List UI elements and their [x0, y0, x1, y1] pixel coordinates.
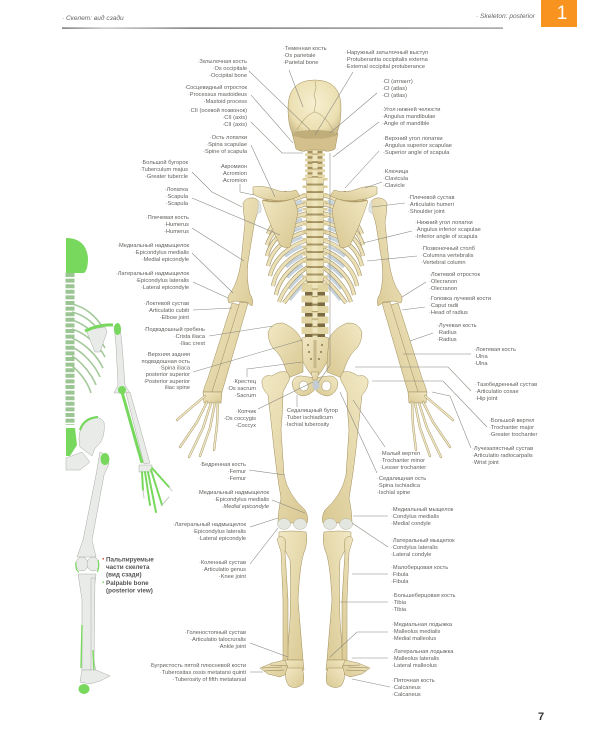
label: greater trochanter: ·Trochanter major [489, 425, 534, 431]
label: lateral malleolus: ·Латеральная лодыжка [392, 649, 453, 655]
label: shoulder joint: ·Плечевой сустав [408, 195, 454, 201]
legend: palpable bone: Пальпируемые [106, 556, 154, 564]
label: inferior angle of scapula: ·Inferior angle of scapula [415, 234, 478, 240]
label: ankle joint: ·Голеностопный сустав [185, 630, 246, 636]
label: parietal bone: ·Os parietale [283, 53, 316, 59]
label: coccyx: ·Os coccygis [223, 416, 256, 422]
label: head of radius: ·Головка лучевой кости [429, 296, 491, 302]
label: mastoid process: ·Сосцевидный отросток [184, 85, 247, 91]
label: atlas: ·CI (atlas) [382, 86, 407, 92]
mini ribs [72, 304, 105, 393]
ribs [267, 195, 308, 308]
label: fibula: ·Fibula [391, 579, 409, 585]
femur [262, 372, 308, 523]
femoral condyles [278, 518, 306, 530]
label: knee joint: ·Коленный сустав [199, 560, 246, 566]
label: ischial spine: ·Spina ischiadica [377, 483, 420, 489]
mini spine [66, 273, 74, 425]
label: lateral epicondyle of humerus: ·Латеральный надмыщелок [116, 271, 189, 277]
label: greater tubercle: ·Большой бугорок [141, 160, 188, 166]
label: superior angle of scapula: ·Angulus superior scapulae [383, 143, 452, 149]
label: elbow joint: ·Articulatio cubiti [147, 308, 189, 314]
mini sacrum [66, 428, 77, 456]
label: tibia: ·Tibia [392, 600, 406, 606]
mini olecranon [118, 386, 126, 394]
chapter tab: 1 [557, 3, 567, 24]
clavicle and acromion [253, 186, 300, 201]
label: calcaneus: ·Calcaneus [392, 685, 421, 691]
label: superior angle of scapula: ·Верхний угол лопатки [383, 136, 443, 142]
label: greater tubercle: ·Tuberculum majus [140, 167, 188, 173]
label: inferior angle of scapula: ·Angulus inferior scapulae [415, 227, 481, 233]
mini hand [139, 465, 172, 512]
label: lateral malleolus: ·Malleolus lateralis [392, 656, 439, 662]
label: hip joint: ·Hip joint [475, 396, 498, 402]
label: angle of mandible: ·Angulus mandibulae [382, 114, 435, 120]
label: lateral epicondyle of humerus: ·Lateral epicondyle [141, 285, 189, 291]
mini clavicle [85, 325, 113, 331]
label: lateral epicondyle of femur: ·Латеральный надмыщелок [173, 522, 246, 528]
label: medial malleolus: ·Malleolus medialis [392, 629, 440, 635]
legend: palpable bone [102, 556, 154, 594]
header rule [62, 28, 503, 29]
mini shin highlights [81, 625, 94, 672]
sutures [297, 81, 333, 130]
label: humerus: ·Humerus [164, 222, 189, 228]
label: medial epicondyle of femur: ·Медиальный надмыщелок [197, 490, 269, 496]
label: posterior superior iliac spine: подвздошная ость [142, 359, 190, 365]
label: acromion: ·Acromion [221, 178, 247, 184]
calcaneus [285, 668, 304, 688]
label: occipital bone: ·Os occipitale [213, 66, 247, 72]
fingers [177, 396, 218, 457]
label: medial epicondyle of humerus: ·Медиальный надмыщелок [117, 243, 189, 249]
ischial ring [292, 376, 316, 396]
label: posterior superior iliac spine: ·Spina iliaca [159, 366, 190, 372]
label: coccyx: ·Копчик [236, 409, 256, 415]
fibula [277, 536, 288, 668]
label: spine of scapula: ·Ость лопатки [210, 135, 247, 141]
label: axis: ·CII (axis) [222, 115, 247, 121]
label: spine of scapula: ·Spina scapulae [206, 142, 247, 148]
label: greater trochanter: ·Greater trochanter [489, 432, 537, 438]
label: ulna: ·Ulna [474, 361, 488, 367]
label: scapula: ·Scapula [166, 201, 189, 207]
label: wrist joint: ·Wrist joint [472, 460, 499, 466]
label: fibula: ·Малоберцовая кость [391, 565, 448, 571]
label: clavicle: ·Ключица [383, 169, 408, 175]
tibia [279, 531, 307, 660]
label: axis: ·CII (axis) [222, 122, 247, 128]
legend: palpable bone: (posterior view) [106, 588, 153, 594]
label: radius: ·Radius [437, 337, 457, 343]
label: parietal bone: ·Теменная кость [283, 46, 327, 52]
mini foot [80, 670, 110, 684]
label: lateral malleolus: ·Lateral malleolus [392, 663, 437, 669]
mini ilium [79, 417, 104, 456]
label: ulna: ·Локтевая кость [474, 347, 516, 353]
sacrum [302, 336, 329, 378]
label: medial epicondyle of femur: ·Epicondylus medialis [214, 497, 269, 503]
label: scapula: ·Scapula [166, 194, 188, 200]
ilium [268, 323, 303, 378]
label: hip joint: ·Тазобедренный сустав [475, 382, 537, 388]
legend: palpable bone: (вид сзади) [106, 572, 142, 578]
label: vertebral column: ·Vertebral column [421, 260, 466, 266]
pubic symphysis [312, 380, 320, 390]
mini skull [66, 238, 88, 273]
legend: palpable bone: части скелета [106, 564, 150, 571]
label: clavicle: ·Clavicula [383, 176, 408, 182]
label: greater trochanter: ·Большой вертел [489, 418, 534, 424]
label: sacrum: ·Крестец [233, 379, 256, 385]
leader lines [192, 70, 487, 687]
label: humerus: ·Humerus [164, 229, 189, 235]
chapter tab [541, 0, 577, 27]
label: tuberosity of fifth metatarsal: ·Tuberositas ossis metatarsi quinti [160, 670, 246, 676]
label: shoulder joint: ·Articulatio humeri [408, 202, 454, 208]
label: medial condyle: ·Медиальный мыщелок [391, 507, 453, 513]
label: iliac crest: ·Iliac crest [179, 341, 205, 347]
label: olecranon: ·Olecranon [429, 279, 457, 285]
mini trochanter [100, 453, 110, 465]
page number: 7 [538, 711, 544, 723]
label: sacrum: ·Sacrum [234, 393, 256, 399]
label: sacrum: ·Os sacrum [227, 386, 256, 392]
label: shoulder joint: ·Shoulder joint [408, 209, 445, 215]
label: vertebral column: ·Columna vertebralis [421, 253, 473, 259]
label: fibula: ·Fibula [391, 572, 408, 578]
label: occipital bone: ·Occipital bone [209, 73, 247, 79]
label: ankle joint: ·Articulatio talocruralis [190, 637, 246, 643]
header [62, 0, 577, 29]
label: occipital bone: ·Затылочная кость [197, 59, 247, 65]
humerus [228, 198, 260, 306]
label: tuberosity of fifth metatarsal: ·Tuberosity of fifth metatarsal [173, 677, 246, 683]
label: lateral condyle: ·Lateral condyle [391, 552, 431, 558]
label: femur: ·Femur [228, 469, 246, 475]
label: coccyx: ·Coccyx [235, 423, 256, 429]
label: tuberosity of fifth metatarsal: ·Бугристость пятой плюсневой кости [149, 663, 246, 669]
label: ischial tuberosity: ·Tuber ischiadicum [285, 415, 333, 421]
label: ischial spine: ·Седалищная ость [377, 476, 426, 482]
label: femur: ·Femur [228, 476, 246, 482]
label: calcaneus: ·Пяточная кость [392, 678, 435, 684]
header title: English: · Skeleton: posterior [476, 13, 536, 20]
carpals [203, 392, 222, 403]
label: knee joint: ·Knee joint [219, 574, 246, 580]
mini knee [76, 557, 99, 572]
mini tibia [78, 574, 96, 670]
label: superior angle of scapula: ·Superior angle of scapula [383, 150, 450, 156]
header title: Russian: · Скелет: вид сзади [62, 14, 124, 22]
label: parietal bone: ·Parietal bone [283, 60, 318, 66]
label: radius: ·Radius [437, 330, 457, 336]
label: lateral condyle: ·Condylus lateralis [391, 545, 438, 551]
skull base [294, 130, 335, 138]
label: atlas: ·CI (атлант) [382, 79, 413, 85]
coccyx [311, 372, 319, 380]
foot [260, 660, 304, 677]
label: ischial tuberosity: ·Седалищный бугор [285, 408, 338, 414]
label: inferior angle of scapula: ·Нижний угол лопатки [415, 220, 473, 226]
label: medial malleolus: ·Медиальная лодыжка [392, 622, 452, 628]
label: medial malleolus: ·Medial malleolus [392, 636, 436, 642]
label: axis: ·CII (осевой позвонок) [189, 108, 247, 114]
label: wrist joint: ·Лучезапястный сустав [472, 446, 533, 452]
label: clavicle: ·Clavicle [383, 183, 405, 189]
label: femur: ·Бедренная кость [199, 462, 246, 468]
mini ischium [66, 452, 90, 470]
label: posterior superior iliac spine: iliac spine [165, 385, 190, 391]
label: angle of mandible: ·Угол нижней челюсти [382, 107, 440, 113]
shoulder cartilage [257, 200, 261, 214]
label: ischial spine: ·Ischial spine [377, 490, 410, 496]
mandible [292, 133, 338, 151]
mini humerus [114, 326, 130, 393]
label: spine of scapula: ·Spine of scapula [203, 149, 248, 155]
skull [288, 80, 341, 151]
ulna [203, 303, 240, 392]
label: iliac crest: ·Подвздошный гребень [143, 327, 205, 333]
label: medial epicondyle of humerus: ·Medial epicondyle [142, 257, 189, 263]
label: olecranon: ·Локтевой отросток [429, 272, 480, 278]
label: tibia: ·Tibia [392, 607, 407, 613]
cranium [288, 80, 341, 138]
right half of skeleton [314, 186, 453, 688]
label: lateral epicondyle of femur: ·Lateral epicondyle [198, 536, 246, 542]
label: iliac crest: ·Crista iliaca [174, 334, 205, 340]
mini calcaneus [78, 684, 90, 694]
scapular spine [263, 198, 293, 202]
label: posterior superior iliac spine: ·Верхняя задняя [146, 352, 190, 358]
label: greater tubercle: ·Greater tubercle [145, 174, 188, 180]
mini femur [77, 452, 109, 557]
label: wrist joint: ·Articulatio radiocarpalis [472, 453, 533, 459]
label: hip joint: ·Articulatio coxae [475, 389, 519, 395]
vertebral column [308, 148, 322, 337]
label: angle of mandible: ·Angle of mandible [382, 121, 429, 127]
mini ilium crest [80, 417, 98, 430]
label: radius: ·Лучевая кость [437, 323, 477, 329]
label: acromion: ·Acromion [221, 171, 247, 177]
label: tibia: ·Большеберцовая кость [392, 593, 455, 599]
label: posterior superior iliac spine: posterior superior [146, 372, 190, 378]
label: medial condyle: ·Condylus medialis [391, 514, 439, 520]
label: medial condyle: ·Medial condyle [391, 521, 431, 527]
label: lesser trochanter: ·Trochanter minor [380, 458, 425, 464]
label: acromion: ·Акромион [219, 164, 247, 170]
label: mastoid process: ·Mastoid process [204, 99, 247, 105]
label: external occipital protuberance: ·External occipital protuberance [345, 64, 425, 70]
mini ulna [122, 392, 142, 463]
scapula [262, 191, 298, 248]
label: lateral epicondyle of humerus: ·Epicondylus lateralis [135, 278, 189, 284]
label: mastoid process: ·Processus mastoideus [188, 92, 247, 98]
mini radius [126, 392, 150, 464]
left half of skeleton [177, 186, 316, 688]
label: lateral epicondyle of femur: ·Epicondylus lateralis [192, 529, 246, 535]
label: ischial tuberosity: ·Ischial tuberosity [285, 422, 329, 428]
mini scapula [86, 327, 107, 352]
label: head of radius: ·Caput radii [429, 303, 458, 309]
label: elbow joint: ·Локтевой сустав [144, 301, 189, 307]
label: knee joint: ·Articulatio genus [202, 567, 246, 573]
label: scapula: ·Лопатка [165, 187, 188, 193]
label: head of radius: ·Head of radius [429, 310, 468, 316]
mini skeleton: palpable bone [66, 238, 172, 694]
label: external occipital protuberance: ·Наружный затылочный выступ [345, 50, 428, 56]
label: medial epicondyle of humerus: ·Epicondylus medialis [134, 250, 189, 256]
label: vertebral column: ·Позвоночный столб [421, 246, 475, 252]
label: olecranon: ·Olecranon [429, 286, 457, 292]
legend: palpable bone: Palpable bone [106, 580, 149, 587]
radius [212, 302, 248, 392]
label: external occipital protuberance: ·Protuberantia occipitalis externa [345, 57, 428, 63]
label: ankle joint: ·Ankle joint [218, 644, 246, 650]
label: humerus: ·Плечевая кость [146, 215, 189, 221]
label: lesser trochanter: ·Lesser trochanter [380, 465, 426, 471]
mini fibula [91, 578, 96, 672]
label: elbow joint: ·Elbow joint [160, 315, 189, 321]
label: calcaneus: ·Calcaneus [392, 692, 421, 698]
label: medial epicondyle of femur: ·Medial epicondyle [222, 504, 269, 510]
label: ulna: ·Ulna [474, 354, 488, 360]
label: atlas: ·CI (atlas) [382, 93, 407, 99]
mini shoulder highlight [114, 323, 121, 335]
label: posterior superior iliac spine: ·Posterior superior [143, 379, 190, 385]
skeleton [177, 80, 453, 688]
label: lateral condyle: ·Латеральный мыщелок [391, 538, 455, 544]
label: lesser trochanter: ·Малый вертел [380, 451, 420, 457]
